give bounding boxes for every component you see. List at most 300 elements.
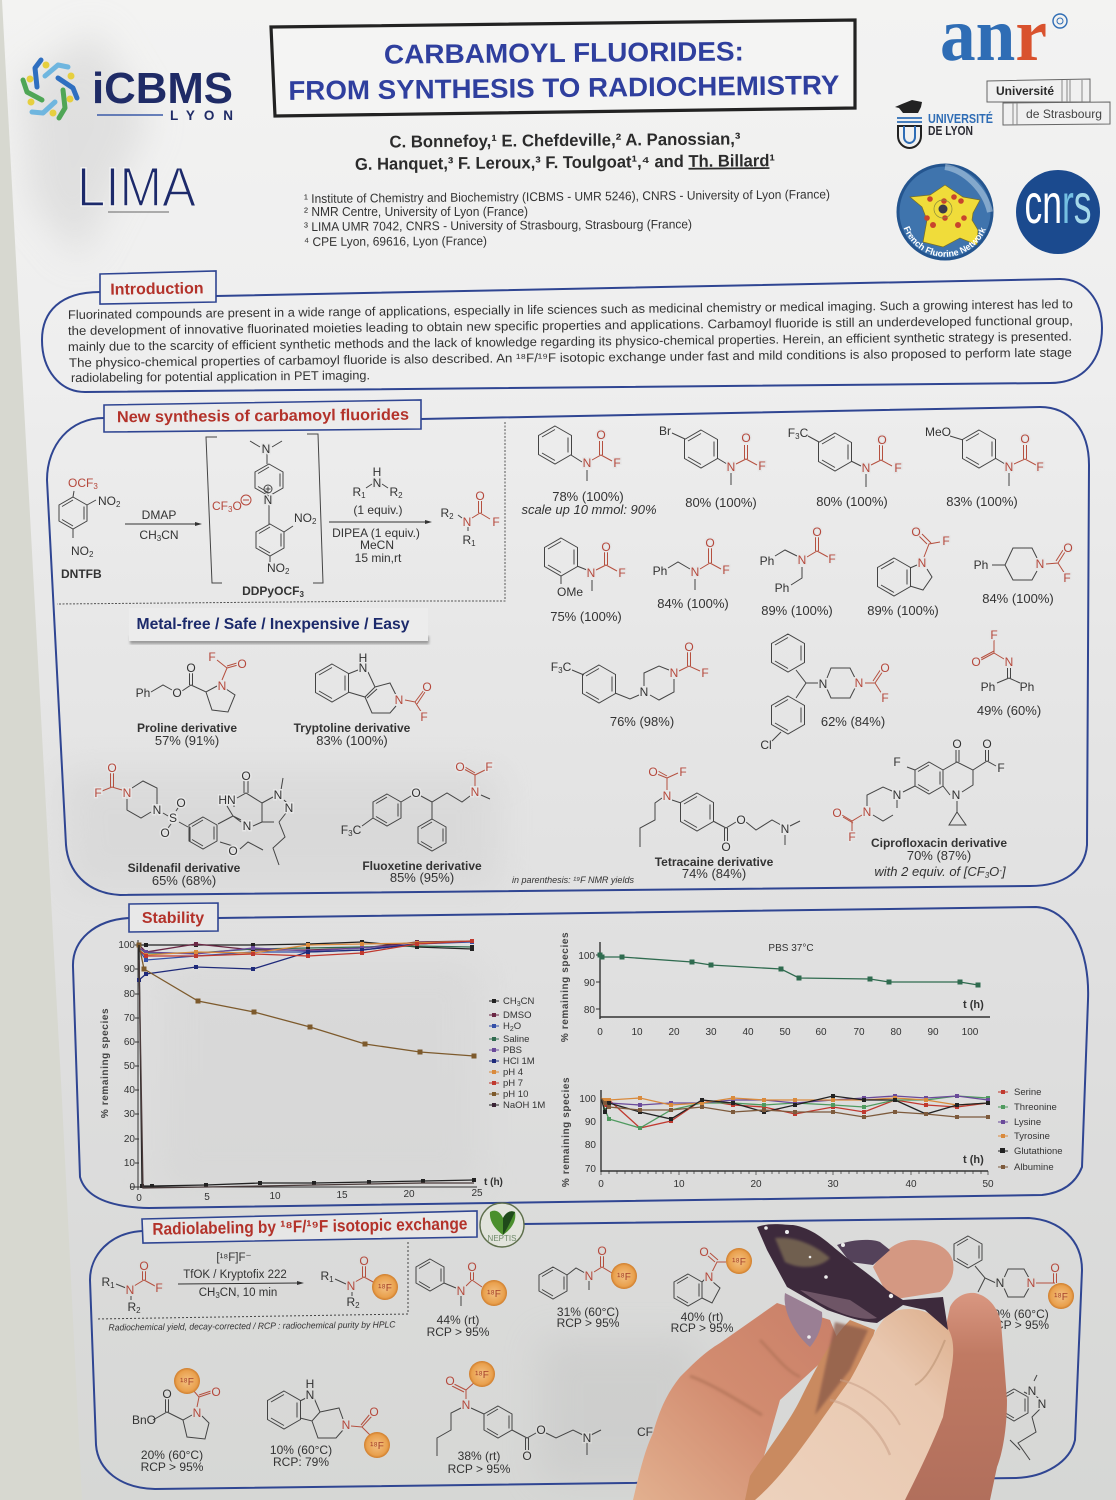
authors: G. Hanquet,³ F. Leroux,³ F. Toulgoat¹,⁴ and Th. Billard¹: [355, 151, 775, 174]
compound: N-benzyl-N-methyl: Ph: [653, 564, 667, 578]
compound: 2-methoxy: N: [587, 566, 595, 580]
chart: amino acids and proteins: t (h): [963, 1154, 984, 1166]
arrow: CH: [199, 1287, 215, 1299]
compound: 18F N-benzyl: N: [585, 1269, 593, 1283]
compound: 18F tryptoline: 10% (60°C): [270, 1443, 332, 1457]
compound: ciprofloxacin derivative: ]: [1000, 864, 1006, 879]
arrow: amine conditions: N: [373, 476, 381, 490]
compound: 4-trifluoromethyl: C: [800, 426, 809, 440]
title box: [271, 20, 855, 116]
compound: indoline: 89% (100%): [867, 603, 939, 618]
product: generic carbamoyl fluoride: R: [462, 533, 471, 547]
compound: ciprofloxacin derivative: with 2 equiv. of [CF: [874, 864, 985, 879]
legend: HCl 1M: [503, 1056, 535, 1067]
compound: sildenafil derivative: O: [228, 844, 238, 858]
arrow: DMAP: [125, 508, 202, 543]
chart: stability in solvents and pH: 0: [136, 1193, 142, 1204]
reaction scheme: isotopic exchange: R: [346, 1295, 355, 1309]
bracketed intermediate DDPyOCF3: NO: [294, 511, 312, 525]
compound: N-methyl-N-phenyl: scale up 10 mmol: 90%: [521, 502, 657, 517]
chart: amino acids and proteins: [561, 1077, 1063, 1190]
legend: pH 7: [503, 1078, 523, 1089]
arrow: [¹⁸F]F⁻: [216, 1252, 252, 1264]
logo: CNRS: cnrs: [1024, 172, 1092, 235]
compound: 18F proline: BnO: [132, 1413, 156, 1427]
bracketed intermediate DDPyOCF3: 2: [285, 567, 290, 576]
compound: 4-trifluoromethyl: F: [894, 461, 902, 475]
compound: 18F N-benzyl: [539, 1244, 637, 1330]
affiliations: [304, 187, 830, 249]
arrow: amine conditions: DIPEA (1 equiv.): [332, 526, 420, 540]
reaction scheme: DNTFB to DDPyOCF3 to carbamoyl fluoride: [59, 434, 500, 599]
figurine: [757, 1224, 948, 1347]
compound: proline derivative: N: [218, 679, 226, 693]
arrow: amine conditions: MeCN: [360, 538, 394, 552]
compound: trifluoromethylbenzyl piperazine: N: [640, 685, 648, 699]
chart: PBS 37°C: 90: [927, 1027, 939, 1038]
compound: benzhydryl piperazine: F: [881, 691, 889, 705]
hand: thumb: [755, 1309, 953, 1500]
heading: Stability: [129, 903, 218, 932]
compound: N-benzyl-N-methyl: F: [722, 563, 730, 577]
compound: N-benzyl-N-methyl: 84% (100%): [657, 596, 729, 611]
compound: tryptoline derivative: 83% (100%): [316, 733, 388, 748]
reaction scheme: isotopic exchange: R: [320, 1269, 329, 1283]
logo: Université de Strasbourg: [987, 79, 1110, 125]
legend: H: [503, 1021, 510, 1032]
compound: tryptoline derivative: Tryptoline derivative: [294, 721, 411, 735]
compound: 18F benzhydryl piperazine: ¹⁸F: [1054, 1292, 1068, 1303]
compound: sildenafil derivative: N: [123, 786, 131, 800]
compound: 18F tryptoline: RCP: 79%: [273, 1455, 329, 1469]
title box: FROM SYNTHESIS TO RADIOCHEMISTRY: [288, 70, 840, 106]
chart: stability in solvents and pH: 60: [124, 1037, 135, 1048]
compound: 18F sildenafil, hidden behind hand: N: [1028, 1384, 1036, 1398]
compound: sildenafil derivative: O: [176, 796, 186, 810]
compound: 4-methoxy: F: [1036, 460, 1044, 474]
compound: indoline: F: [942, 534, 950, 548]
compound: benzhydryl piperazine: O: [880, 661, 890, 675]
bracketed intermediate DDPyOCF3: 2: [312, 517, 317, 526]
compound: 18F tetracaine: O: [445, 1374, 455, 1388]
logo: French Fluorine Network: French Fluorine Network: [904, 226, 986, 257]
bracketed intermediate DDPyOCF3: [206, 434, 323, 599]
compound: N-methyl-N-phenyl: O: [596, 428, 606, 442]
compound: ciprofloxacin derivative: F: [848, 830, 856, 844]
compound: 18F N-methylaniline: RCP > 95%: [427, 1325, 490, 1339]
product: generic carbamoyl fluoride: 2: [449, 512, 454, 521]
compound: 4-bromo: F: [758, 459, 766, 473]
compound: ciprofloxacin derivative: O: [832, 806, 842, 820]
compound: benzhydryl piperazine: [760, 634, 890, 752]
arrow: amine conditions: R: [389, 485, 398, 499]
compound: benzhydryl piperazine: 62% (84%): [821, 714, 885, 729]
chart: stability in solvents and pH: 10: [269, 1191, 281, 1202]
legend: Lysine: [1014, 1117, 1041, 1128]
bracketed intermediate DDPyOCF3: O: [232, 499, 242, 513]
compound: trifluoromethylbenzyl piperazine: 76% (98%): [610, 714, 674, 729]
legend: pH 4: [503, 1067, 523, 1078]
compound: fluoxetine derivative: F: [485, 760, 493, 774]
compound: trifluoromethylbenzyl piperazine: F: [701, 666, 709, 680]
logo: CNRS: [1016, 170, 1100, 254]
chart: stability in solvents and pH: 80: [124, 989, 135, 1000]
compound: ciprofloxacin derivative: N: [863, 805, 871, 819]
compound: proline derivative: O: [186, 661, 196, 675]
compound: 18F tryptoline: ¹⁸F: [370, 1441, 384, 1452]
compound: 4-methoxy: N: [1005, 460, 1013, 474]
compound: ciprofloxacin derivative: 3: [985, 871, 990, 880]
legend: Glutathione: [1014, 1146, 1063, 1157]
compound: sildenafil derivative: HN: [218, 793, 236, 807]
DNTFB: DNTFB: [61, 567, 102, 581]
compound: 18F N-benzyl: O: [597, 1244, 607, 1258]
compound: 18F fluoxetine, hidden behind hand: CF: [637, 1425, 653, 1439]
compound: 2-methoxy: 75% (100%): [550, 609, 622, 624]
compound: fluoxetine derivative: N: [471, 785, 479, 799]
legend: pH 10: [503, 1089, 528, 1100]
chart: stability in solvents and pH: 0: [129, 1182, 135, 1193]
compound: proline derivative: 57% (91%): [155, 733, 219, 748]
arrow: TfOK / Kryptofix 222: [183, 1269, 287, 1281]
compound: 18F tryptoline: N: [342, 1418, 350, 1432]
legend: Saline: [503, 1034, 529, 1045]
chart: stability in solvents and pH: 90: [124, 964, 135, 975]
chart: stability in solvents and pH: 40: [124, 1085, 135, 1096]
compound: ciprofloxacin derivative: F: [893, 755, 901, 769]
arrow: amine conditions: (1 equiv.): [353, 503, 403, 517]
bracketed intermediate DDPyOCF3: CF: [212, 499, 228, 513]
chart: PBS 37°C: 80: [890, 1027, 902, 1038]
compound: indoline: O: [911, 525, 921, 539]
reaction scheme: isotopic exchange: 1: [110, 1281, 115, 1290]
affiliations: ³ LIMA UMR 7042, CNRS - University of Strasbourg, Strasbourg (France): [304, 217, 692, 234]
compound: 18F tryptoline: H: [306, 1377, 314, 1391]
compound: tetracaine derivative: 74% (84%): [682, 866, 746, 881]
arrow: amine conditions: H: [373, 465, 381, 479]
compound: ciprofloxacin derivative: -: [999, 866, 1002, 875]
compound: 18F proline: O: [162, 1387, 172, 1401]
logo: iCBMS Lyon: iCBMS: [92, 64, 233, 113]
product: generic carbamoyl fluoride: O: [475, 489, 485, 503]
chart: PBS 37°C: 100: [578, 951, 595, 962]
compound: 18F benzhydryl piperazine: [954, 1236, 1074, 1332]
chart: PBS 37°C: 70: [853, 1027, 865, 1038]
compound: 18F N-methylaniline: N: [457, 1284, 465, 1298]
compound: benzhydryl piperazine: Cl: [760, 738, 772, 752]
compound: ciprofloxacin derivative: Ciprofloxacin derivative: [871, 836, 1007, 850]
hand: index finger: [633, 1303, 840, 1500]
compound: tryptoline derivative: O: [422, 680, 432, 694]
legend: Tyrosine: [1014, 1131, 1050, 1142]
compound: 18F N-methylaniline: [416, 1259, 507, 1339]
compound: 18F indoline: [671, 1245, 752, 1335]
introduction text: radiolabeling for potential application in PET imaging.: [71, 368, 370, 385]
compound: 18F proline: RCP > 95%: [141, 1460, 204, 1474]
legend: 2: [510, 1026, 514, 1033]
bracketed intermediate DDPyOCF3: N: [262, 442, 270, 456]
compound: 2-methoxy: O: [601, 540, 611, 554]
compound: 18F N-benzyl: 31% (60°C): [557, 1305, 619, 1319]
reaction scheme: isotopic exchange: 1: [329, 1275, 334, 1284]
compound: 18F sildenafil, hidden behind hand: [1000, 1375, 1046, 1460]
chart: PBS 37°C: PBS 37°C: [768, 943, 814, 954]
compound: sildenafil derivative: N: [274, 788, 282, 802]
arrow: DMAP: CH: [139, 528, 157, 542]
logo: Université de Lyon: UNIVERSITÉ: [928, 111, 993, 126]
compound: 18F tetracaine: ¹⁸F: [475, 1370, 489, 1381]
compound: trifluoromethylbenzyl piperazine: O: [684, 640, 694, 654]
authors: C. Bonnefoy,¹ E. Chefdeville,² A. Panossian,³: [389, 129, 741, 152]
compound: ciprofloxacin derivative: F: [997, 761, 1005, 775]
compound: sildenafil derivative: N: [285, 801, 293, 815]
chart: amino acids and proteins: 30: [827, 1179, 839, 1190]
reaction scheme: isotopic exchange: O: [139, 1259, 149, 1273]
compound: 4-methoxy: [925, 425, 1044, 509]
DNTFB: NO: [98, 494, 116, 508]
compound: 2-methoxy: OMe: [557, 585, 583, 599]
compound: 18F tetracaine: [437, 1361, 601, 1476]
hand: middle finger and shadow: [745, 1320, 875, 1500]
logo: NEPTIS: NEPTIS: [488, 1234, 516, 1243]
compound: 18F tetracaine: RCP > 95%: [448, 1462, 511, 1476]
legend: Albumine: [1014, 1162, 1054, 1173]
compound: 18F proline: ¹⁸F: [180, 1377, 194, 1388]
compound: 4-bromo: Br: [659, 424, 671, 438]
compound: 2-methoxy: [544, 538, 626, 624]
compound: 18F N-methylaniline: O: [467, 1260, 477, 1274]
title box: CARBAMOYL FLUORIDES:: [384, 36, 744, 70]
chart: amino acids and proteins: 20: [750, 1179, 762, 1190]
compound: tetracaine derivative: F: [679, 765, 687, 779]
compound: proline derivative: [136, 650, 247, 748]
DNTFB: [59, 476, 121, 581]
affiliations: ⁴ CPE Lyon, 69616, Lyon (France): [304, 234, 487, 249]
reaction scheme: isotopic exchange: ¹⁸F: [378, 1283, 392, 1294]
compound: tryptoline derivative: H: [359, 651, 367, 665]
arrow: amine conditions: 2: [398, 491, 403, 500]
compound: sildenafil derivative: N: [153, 803, 161, 817]
legend: [489, 996, 545, 1111]
DNTFB: 2: [116, 500, 121, 509]
compound: tryptoline derivative: F: [420, 710, 428, 724]
compound: tetracaine derivative: [640, 765, 800, 881]
legend: PBS: [503, 1045, 522, 1056]
arrow: amine conditions: 15 min,rt: [355, 551, 402, 565]
reaction scheme: isotopic exchange: 2: [355, 1301, 360, 1310]
compound: 18F N-benzyl: RCP > 95%: [557, 1316, 620, 1330]
product: generic carbamoyl fluoride: R: [440, 506, 449, 520]
heading: New synthesis: New synthesis of carbamoyl fluorides: [117, 407, 409, 426]
chart: amino acids and proteins: 100: [579, 1094, 596, 1105]
compound: 4-trifluoromethyl: O: [877, 433, 887, 447]
arrow: DMAP: DMAP: [142, 508, 176, 522]
reaction scheme: isotopic exchange: [101, 1252, 398, 1315]
compound: N-methyl-N-phenyl: F: [613, 456, 621, 470]
compound: N,N-dibenzyl: 89% (100%): [761, 603, 833, 618]
reaction scheme: isotopic exchange: R: [127, 1300, 136, 1314]
compound: 4-methoxy: MeO: [925, 425, 951, 439]
heading: Introduction: Introduction: [110, 280, 204, 299]
compound: ciprofloxacin derivative: [832, 737, 1007, 880]
compound: 18F tetracaine: N: [583, 1431, 591, 1445]
compound: proline derivative: O: [237, 657, 247, 671]
compound: 18F tryptoline: O: [369, 1405, 379, 1419]
compound: trifluoromethylbenzyl piperazine: C: [563, 660, 572, 674]
logo: Université de Strasbourg: de Strasbourg: [1026, 107, 1102, 121]
arrow: amine conditions: 1: [361, 491, 366, 500]
compound: tryptoline derivative: [294, 651, 432, 748]
chart: amino acids and proteins: 90: [585, 1117, 596, 1128]
compound: 18F tetracaine: 38% (rt): [458, 1449, 500, 1463]
chart: PBS 37°C: 0: [597, 1027, 603, 1038]
chart: stability in solvents and pH: 25: [471, 1188, 483, 1199]
reaction scheme: isotopic exchange: O: [359, 1254, 369, 1268]
chart: stability in solvents and pH: 30: [124, 1109, 135, 1120]
compound: 4-phenylpiperidine: 84% (100%): [982, 591, 1054, 606]
compound: benzophenone imine: 49% (60%): [977, 703, 1041, 718]
compound: 4-trifluoromethyl: [788, 426, 902, 509]
compound: N,N-dibenzyl: O: [812, 525, 822, 539]
bracketed intermediate DDPyOCF3: 3: [228, 505, 233, 514]
chart: stability in solvents and pH: 15: [336, 1190, 348, 1201]
introduction text: mainly due to the scarcity of efficient synthetic methods and the lack of knowledge regarding its physico-chemical properties. Herein, an efficient synthetic strategy is presented.: [68, 329, 1072, 354]
chart: PBS 37°C: % remaining species: [560, 932, 571, 1042]
compound: 4-trifluoromethyl: N: [862, 461, 870, 475]
compound: fluoxetine derivative: C: [353, 823, 362, 837]
chart: stability in solvents and pH: 100: [118, 940, 135, 951]
compound: fluoxetine derivative: 3: [348, 829, 353, 838]
compound: benzophenone imine: O: [971, 655, 981, 669]
compound: 4-trifluoromethyl: 3: [795, 432, 800, 441]
compound: 18F tryptoline: [268, 1377, 390, 1469]
bracketed intermediate DDPyOCF3: 3: [299, 590, 304, 599]
legend: NaOH 1M: [503, 1100, 545, 1111]
compound: benzophenone imine: F: [990, 628, 998, 642]
compound: 4-phenylpiperidine: F: [1063, 571, 1071, 585]
compound: 18F proline: N: [193, 1406, 201, 1420]
compound: 4-phenylpiperidine: Ph: [974, 558, 988, 572]
compound: ciprofloxacin derivative: N: [893, 788, 901, 802]
chart: PBS 37°C: 10: [631, 1027, 643, 1038]
compound: fluoxetine derivative: O: [455, 760, 465, 774]
heading: Stability: Stability: [142, 910, 204, 927]
compound: 18F tetracaine: O: [522, 1449, 532, 1463]
compound: fluoxetine derivative: Fluoxetine derivative: [362, 859, 482, 873]
compound: benzophenone imine: Ph: [981, 680, 995, 694]
compound: N-methyl-N-phenyl: 78% (100%): [552, 489, 624, 504]
chart: stability in solvents and pH: 50: [124, 1061, 135, 1072]
compound: 4-methoxy: O: [1020, 432, 1030, 446]
compound: N,N-dibenzyl: Ph: [775, 581, 789, 595]
compound: 4-trifluoromethyl: F: [788, 426, 795, 440]
chart: PBS 37°C: 40: [742, 1027, 754, 1038]
legend: 3: [517, 1001, 521, 1008]
reaction scheme: isotopic exchange: R: [101, 1275, 110, 1289]
panel: stability: [73, 903, 1088, 1208]
affiliations: ¹ Institute of Chemistry and Biochemistry (ICBMS - UMR 5246), CNRS - University of Lyon (France): [304, 187, 830, 206]
compound: trifluoromethylbenzyl piperazine: 3: [558, 666, 563, 675]
chart: amino acids and proteins: 40: [905, 1179, 917, 1190]
introduction text: Fluorinated compounds are present in a wide range of applications, especially in life sciences such as medicinal chemistry or medical imaging. Such a growing interest has led to: [68, 297, 1073, 322]
compound: benzophenone imine: N: [1005, 655, 1013, 669]
compound: sildenafil derivative: O: [107, 761, 117, 775]
bracketed intermediate DDPyOCF3: N: [264, 493, 272, 507]
chart: PBS 37°C: 80: [584, 1005, 595, 1016]
chart: PBS 37°C: 60: [815, 1027, 827, 1038]
DNTFB: 3: [93, 482, 98, 491]
compound: sildenafil derivative: [94, 761, 293, 888]
legend: [998, 1087, 1063, 1173]
chart: PBS 37°C: 20: [668, 1027, 680, 1038]
introduction text: The physico-chemical properties of carbamoyl fluoride is also described. An ¹⁸F/¹⁹F isotopic exchange under fast and mild conditions is also proposed to perform late stage: [69, 345, 1072, 370]
chart: stability in solvents and pH: [100, 940, 545, 1204]
compound: ciprofloxacin derivative: O: [982, 737, 992, 751]
compound: ciprofloxacin derivative: 70% (87%): [907, 848, 971, 863]
legend: Threonine: [1014, 1102, 1057, 1113]
reaction scheme: isotopic exchange: N: [347, 1279, 355, 1293]
chart: amino acids and proteins: 10: [673, 1179, 685, 1190]
compound: 18F tryptoline: N: [306, 1388, 314, 1402]
compound: N-methyl-N-phenyl: N: [583, 456, 591, 470]
authors: [355, 129, 775, 174]
compound: 4-methoxy: 83% (100%): [946, 494, 1018, 509]
compound: trifluoromethylbenzyl piperazine: F: [551, 660, 558, 674]
chart: stability in solvents and pH: 5: [204, 1192, 210, 1203]
compound: tetracaine derivative: O: [721, 840, 731, 854]
compound: sildenafil derivative: Sildenafil derivative: [128, 861, 241, 875]
compound: 18F indoline: N: [705, 1270, 713, 1284]
compound: N-methyl-N-phenyl: [521, 426, 657, 517]
compound: N,N-dibenzyl: F: [828, 552, 836, 566]
compound: 18F N-benzyl: ¹⁸F: [617, 1272, 631, 1283]
arrow: [178, 1252, 304, 1300]
compound: sildenafil derivative: S: [169, 811, 177, 825]
compound: sildenafil derivative: F: [94, 786, 102, 800]
compound: tetracaine derivative: O: [648, 765, 658, 779]
chart: stability in solvents and pH: 10: [124, 1158, 135, 1169]
heading: Introduction: [100, 271, 216, 304]
compound: N,N-dibenzyl: N: [798, 553, 806, 567]
arrow: CN, 10 min: [220, 1287, 277, 1299]
DNTFB: NO: [71, 544, 89, 558]
compound: 4-bromo: 80% (100%): [685, 495, 757, 510]
compound: fluoxetine derivative: 85% (95%): [390, 870, 454, 885]
logo: Université de Lyon: DE LYON: [928, 123, 973, 138]
compound: benzophenone imine: Ph: [1020, 680, 1034, 694]
knuckle creases: [690, 1340, 945, 1455]
logo: French Fluorine Network: [896, 164, 994, 260]
compound: 18F sildenafil, hidden behind hand: N: [1038, 1397, 1046, 1411]
compound: N,N-dibenzyl: Ph: [760, 554, 774, 568]
product: generic carbamoyl fluoride: 1: [471, 539, 476, 548]
logo: iCBMS Lyon: LYON: [170, 108, 233, 123]
heading: New synthesis: [104, 400, 421, 432]
compound: tetracaine derivative: N: [781, 822, 789, 836]
compound: 18F indoline: ¹⁸F: [732, 1257, 746, 1268]
affiliations: ² NMR Centre, University of Lyon (France): [304, 205, 528, 219]
compound: 4-phenylpiperidine: O: [1063, 541, 1073, 555]
compound: 18F proline: O: [211, 1385, 221, 1399]
compound: proline derivative: F: [208, 650, 216, 664]
compound: tryptoline derivative: N: [359, 661, 367, 675]
chart: amino acids and proteins: % remaining species: [561, 1077, 572, 1187]
compound: trifluoromethylbenzyl piperazine: [551, 640, 709, 729]
compound: 4-phenylpiperidine: N: [1036, 557, 1044, 571]
logo: Université de Lyon: [895, 100, 993, 148]
banner: Metal-free / Safe / Inexpensive / Easy: Metal-free / Safe / Inexpensive / Easy: [136, 616, 410, 633]
compound: tetracaine derivative: Tetracaine derivative: [655, 855, 774, 869]
